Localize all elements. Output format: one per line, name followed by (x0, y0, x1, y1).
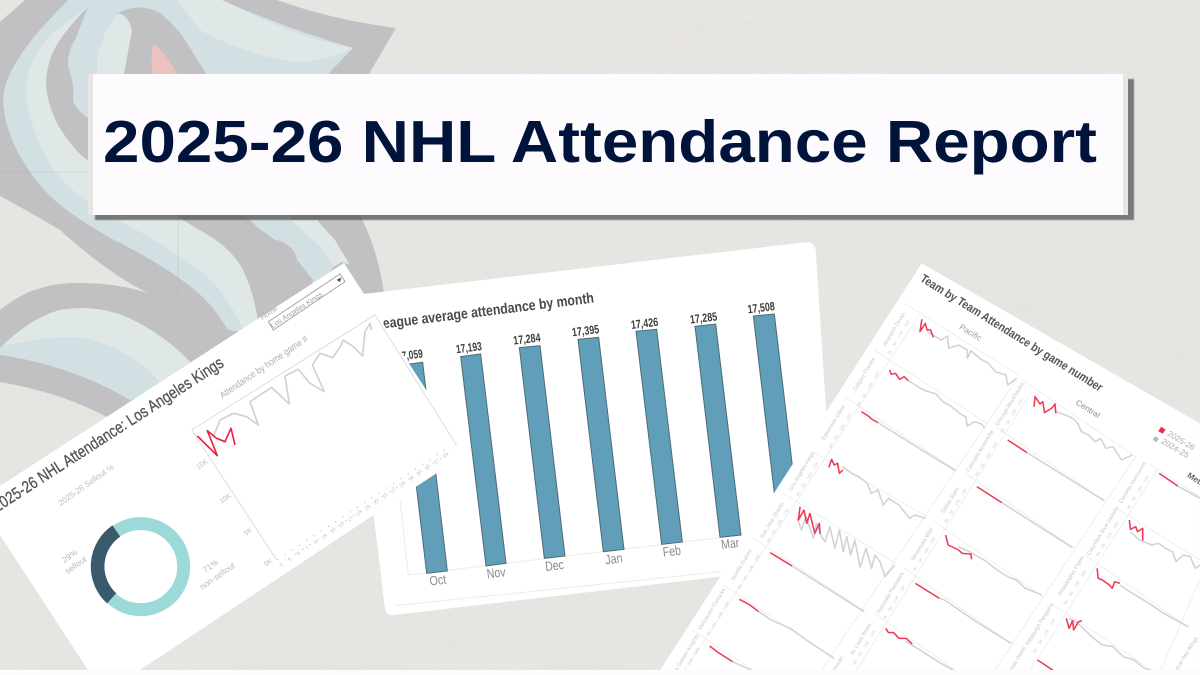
bar chart: monthly attendance: 17,285 (689, 309, 718, 327)
panel: Los Angeles Kings attendance (0, 263, 467, 670)
small multiples: Metropolitan division: Carolina Hurricanes (1118, 461, 1148, 505)
donut chart: sellout share: 71% (201, 557, 220, 575)
line chart: attendance by home game: 21 (364, 504, 372, 512)
bar chart: monthly attendance: 17,284 (512, 330, 542, 348)
panel heading: team by team: Team by Team Attendance by game number (918, 272, 1106, 394)
small multiples: Central division: 0K 5K 10K 15K (852, 629, 877, 665)
line chart: attendance by home game: 33 (416, 469, 424, 477)
small multiples: Metropolitan division: 0K 5K 10K 15K (1032, 617, 1057, 654)
small multiples: Pacific division: 0K 5K 10K 15K (795, 460, 820, 497)
small multiples: Metropolitan division: 0K 5K 10K 15K (1062, 569, 1088, 605)
line chart: attendance by home game: 10K (219, 492, 233, 505)
bar chart: monthly attendance (396, 299, 799, 589)
small multiples: Pacific division: Anaheim Ducks (882, 312, 907, 347)
small multiples: Central division: Chicago Blackhawks (995, 382, 1026, 427)
bar chart: monthly attendance: 17,426 (630, 315, 659, 332)
bar chart: monthly attendance: 17,193 (455, 339, 483, 356)
team filter dropdown: Home (260, 306, 279, 322)
team filter dropdown (260, 274, 345, 330)
grid of cells (682, 303, 1200, 675)
small multiples: Pacific division: 0K 5K 10K 15K (886, 319, 911, 355)
line chart: attendance by home game: 23 (373, 498, 381, 506)
donut chart: sellout share (60, 524, 237, 610)
division label: Central: Central (1074, 398, 1102, 420)
small multiples: Central division: St. Louis Blues (849, 622, 873, 656)
small multiples: Central division: 0K 5K 10K 15K (912, 535, 937, 572)
small multiples: Pacific division: 0K 5K 10K 15K (827, 412, 853, 449)
small multiples: Pacific division: Vancouver Canucks (697, 587, 727, 631)
line chart: attendance by home game: 15K (195, 458, 210, 471)
line chart: attendance by home game: 39 (442, 452, 450, 460)
small multiples: Central division: 0K 5K 10K 15K (943, 487, 968, 524)
team filter dropdown: Los Angeles Kings (269, 289, 325, 330)
small multiples: Central division: Minnesota Wild (910, 527, 935, 562)
small multiples: Metropolitan division (1000, 461, 1200, 675)
bottom white strip (0, 670, 1200, 675)
legend: seasons: 2024-25 (1160, 437, 1191, 460)
panel: team by team attendance (657, 263, 1200, 675)
small multiples: Metropolitan division: Philadelphia Flyers (1057, 555, 1086, 597)
line chart: attendance by home game (192, 315, 457, 568)
title banner (88, 74, 1134, 220)
line chart: attendance by home game: 3 (287, 557, 294, 563)
bar chart: monthly attendance: Dec (544, 557, 565, 574)
donut heading: 2025-26 Sellout % (56, 461, 116, 508)
line chart: attendance by home game: 17 (347, 515, 355, 524)
small multiples: Pacific division: 0K 5K 10K 15K (765, 507, 790, 544)
small multiples: Metropolitan division: 0K 5K 10K 15K (1125, 474, 1150, 510)
small multiples: Pacific division: Edmonton Oilers (821, 404, 847, 441)
bar chart: monthly attendance: Jan (604, 550, 623, 567)
background logo: sea creature emblem (0, 0, 396, 417)
bar chart: monthly attendance: Nov (486, 564, 507, 581)
line chart: attendance by home game: 35 (424, 463, 433, 472)
donut chart: sellout share: sellout (63, 553, 89, 576)
small multiples: Central division: Dallas Stars (940, 486, 961, 514)
title: 2025-26 NHL Attendance Report (103, 109, 1097, 175)
line chart: attendance by home game: 25 (381, 492, 390, 500)
line chart: attendance by home game: 1 (279, 563, 285, 568)
line chart heading: Attendance by home game # (218, 334, 311, 401)
small multiples: Pacific division (668, 312, 1016, 675)
legend: seasons: 2025-26 (1165, 429, 1197, 452)
small multiples: Pacific division: 0K 5K 10K 15K (736, 553, 761, 590)
small multiples: Central division: 0K 5K 10K 15K (999, 397, 1024, 434)
line chart: attendance by home game: 5 (296, 551, 302, 557)
bar chart: monthly attendance: 17,059 (396, 346, 424, 364)
small multiples: Metropolitan division: 0K 5K 10K 15K (1095, 520, 1120, 557)
small multiples: Central division (821, 382, 1132, 675)
line chart: attendance by home game: 0K (263, 558, 274, 568)
small multiples: Pacific division: Calgary Flames (852, 357, 877, 392)
line chart: attendance by home game: 29 (399, 481, 407, 489)
line chart: attendance by home game: 31 (407, 475, 416, 483)
donut chart: sellout share: 29% (60, 547, 80, 565)
panel: league average attendance by month (347, 242, 831, 615)
small multiples: Pacific division: Seattle Kraken (730, 549, 754, 582)
division label: Pacific: Pacific (957, 323, 983, 343)
small multiples: Central division: 0K 5K 10K 15K (881, 584, 907, 620)
small multiples: Metropolitan division: Pittsburgh Penguins (1025, 602, 1055, 647)
line chart: attendance by home game: 5K (243, 527, 254, 537)
small multiples: Pacific division: San Jose Sharks (759, 501, 786, 539)
small multiples: Central division: 0K 5K 10K 15K (974, 440, 999, 477)
small multiples: Metropolitan division: Columbus Blue Jackets (1086, 505, 1121, 557)
small multiples: Pacific division: Los Angeles Kings (788, 451, 817, 492)
bar chart: monthly attendance: 17,508 (747, 299, 776, 316)
small multiples: Pacific division: 0K 5K 10K 15K (705, 600, 731, 636)
small multiples: Central division: Colorado Avalanche (965, 429, 996, 473)
line chart: attendance by home game: 37 (433, 458, 441, 466)
small multiples: Pacific division: 0K 5K 10K 15K (855, 370, 881, 407)
legend: seasons (1153, 427, 1197, 460)
line chart: attendance by home game: 27 (390, 486, 398, 495)
line chart: attendance by home game: 15 (338, 521, 346, 529)
line chart: attendance by home game: 13 (329, 527, 338, 535)
chart heading: league average: League average attendance by month (375, 291, 595, 333)
donut chart: sellout share: non-sellout (198, 560, 237, 592)
line chart: attendance by home game: 7 (305, 545, 311, 551)
small multiples: Central division: Nashville Predators (876, 571, 906, 614)
bar chart: monthly attendance: Feb (662, 543, 682, 560)
bar chart: monthly attendance: Mar (720, 535, 740, 552)
line chart: attendance by home game: 9 (313, 540, 320, 545)
bar chart: monthly attendance: 17,395 (571, 322, 600, 339)
line chart: attendance by home game: 19 (355, 509, 364, 518)
bar chart: monthly attendance: Oct (429, 572, 447, 589)
line chart: attendance by home game: 11 (321, 533, 329, 541)
